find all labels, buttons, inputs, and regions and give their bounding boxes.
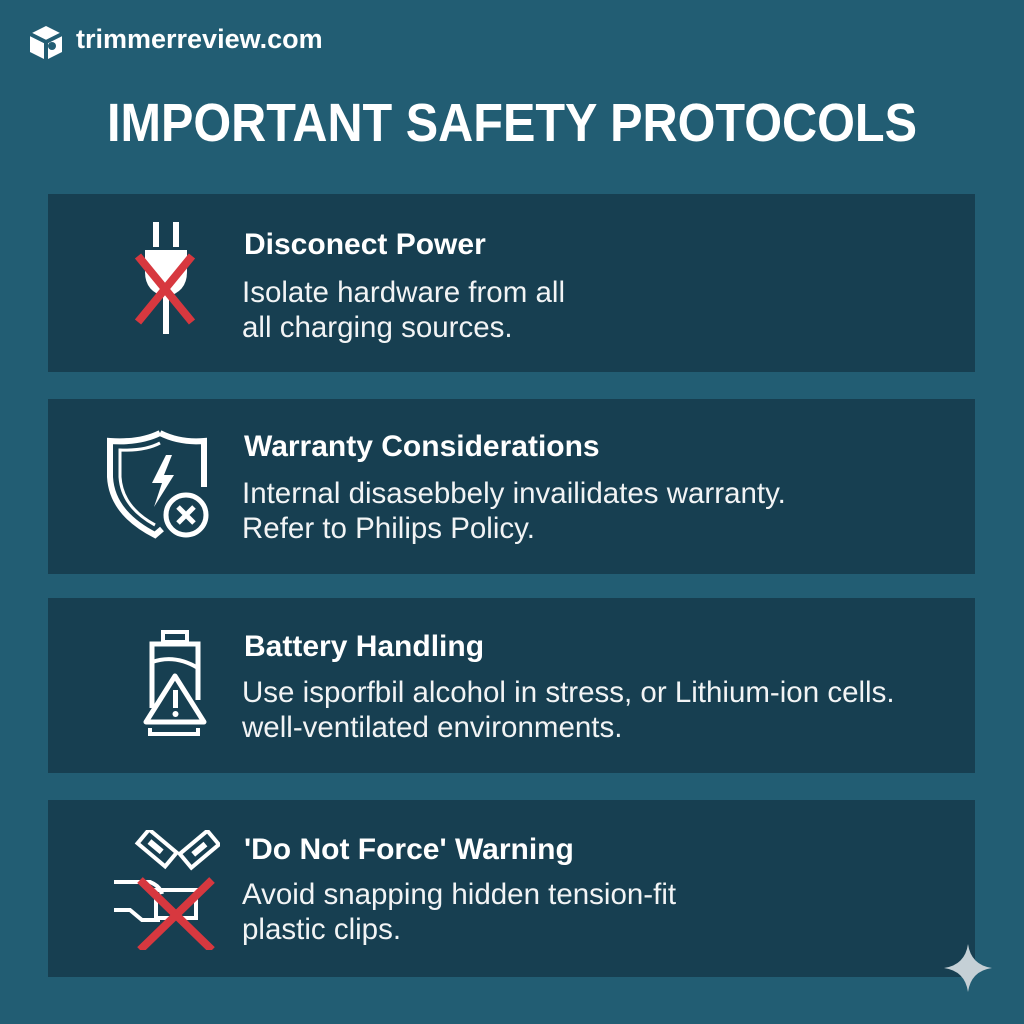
panel: disconnect power	[48, 194, 975, 372]
text: Isolate hardware from all	[242, 276, 565, 309]
text	[242, 676, 895, 744]
heading: Warranty Considerations	[244, 430, 600, 463]
logo	[30, 24, 323, 59]
heading: Battery Handling	[244, 630, 484, 663]
text	[242, 477, 786, 545]
icon: crossed plug	[135, 222, 195, 334]
site name: trimmerreview.com	[76, 24, 323, 54]
icon: cube logo	[30, 26, 62, 59]
text: Avoid snapping hidden tension-fit	[242, 878, 676, 911]
icon: sparkle	[944, 944, 992, 992]
icon: shield with x	[107, 430, 208, 539]
text: Internal disasebbely invailidates warranty.	[242, 477, 786, 510]
panel: battery	[48, 598, 975, 773]
icon: snapping clips crossed	[114, 830, 220, 950]
text: Refer to Philips Policy.	[242, 512, 535, 545]
text: Use isporfbil alcohol in stress, or Lithium-ion cells.	[242, 676, 895, 709]
icon: battery warning	[144, 630, 206, 736]
heading: 'Do Not Force' Warning	[244, 833, 574, 866]
title: IMPORTANT SAFETY PROTOCOLS	[107, 93, 917, 153]
panel: warranty	[48, 399, 975, 574]
heading: Disconect Power	[244, 228, 486, 261]
text: well-ventilated environments.	[242, 711, 622, 744]
text: plastic clips.	[242, 913, 401, 946]
text: all charging sources.	[242, 311, 513, 344]
text	[242, 276, 565, 344]
text	[242, 878, 676, 946]
panel: do not force	[48, 800, 975, 977]
